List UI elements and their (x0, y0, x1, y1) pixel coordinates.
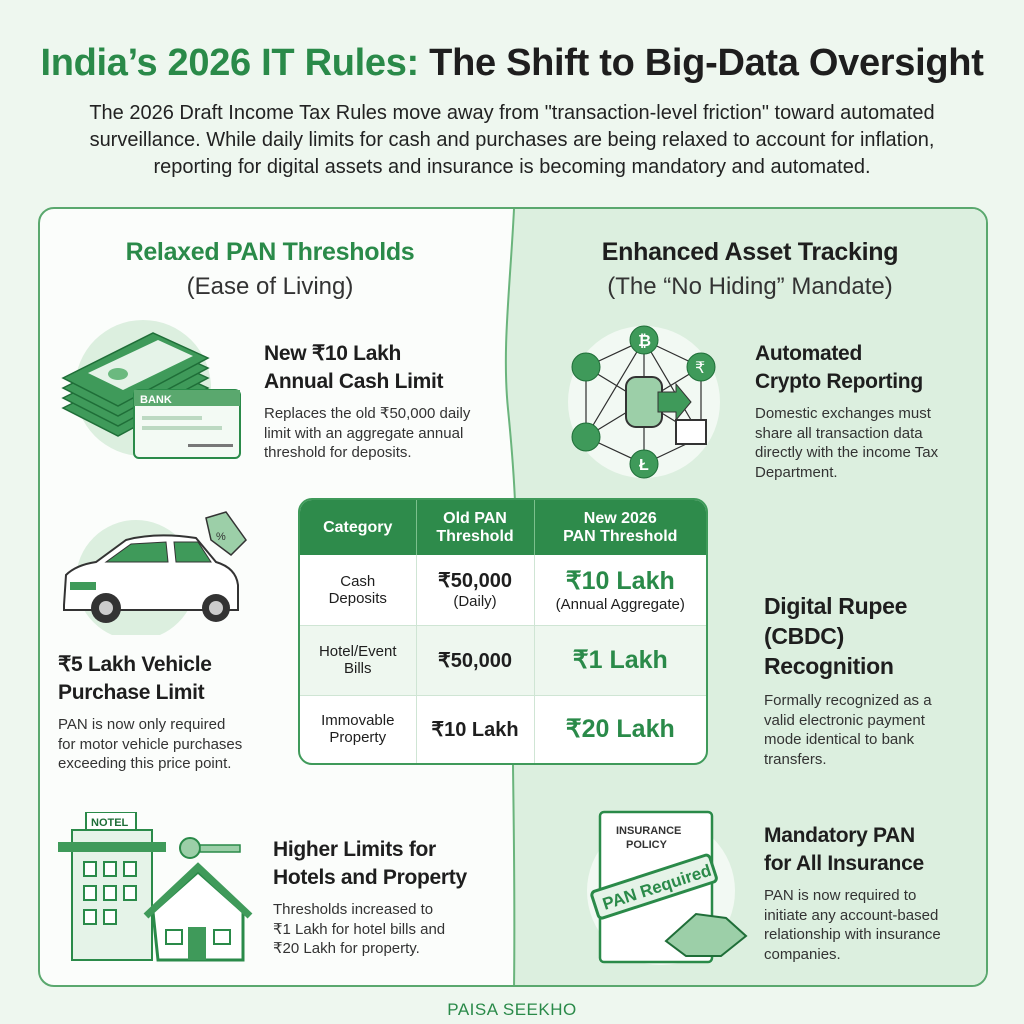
item: vehicle: ₹5 Lakh Vehicle (58, 653, 212, 676)
subtitle: The 2026 Draft Income Tax Rules move away from "transaction-level friction" toward automated (89, 102, 935, 124)
item: crypto: Domestic exchanges must (755, 405, 931, 422)
icon: crypto network (568, 326, 720, 478)
item: hotels: Thresholds increased to (273, 901, 433, 918)
item: cash limit: Annual Cash Limit (264, 370, 443, 393)
heading: enhanced: (The “No Hiding” Mandate) (607, 273, 893, 300)
icon: insurance policy (587, 810, 748, 965)
subtitle: surveillance. While daily limits for cash and purchases are being relaxed to account for inflation, (90, 129, 934, 151)
table: thresholds: ₹20 Lakh (566, 715, 675, 743)
table: thresholds: Property (329, 729, 386, 746)
item: hotels: Higher Limits for (273, 838, 436, 861)
item: cash limit: New ₹10 Lakh (264, 342, 401, 365)
title: India’s 2026 IT Rules: The Shift to Big-Data Oversight (40, 42, 984, 84)
item: vehicle: PAN is now only required (58, 716, 225, 733)
icon: crypto network: ₹ (695, 360, 705, 377)
item: hotels (273, 838, 467, 957)
table: thresholds: Immovable (321, 712, 394, 729)
icon: cash and bank: BANK (140, 394, 172, 406)
heading: enhanced (602, 238, 898, 300)
item: digital rupee: Digital Rupee (764, 593, 907, 619)
item: digital rupee: (CBDC) (764, 623, 844, 649)
subtitle (89, 102, 935, 178)
table: thresholds: Category (323, 518, 392, 536)
icon: hotel and house: NOTEL (91, 817, 129, 829)
item: crypto: Crypto Reporting (755, 370, 923, 393)
table: thresholds: ₹50,000 (438, 570, 512, 592)
main panel (38, 207, 988, 987)
table: thresholds: New 2026 (584, 510, 657, 526)
icon: crypto network: Ł (639, 457, 649, 474)
table: thresholds: (Daily) (453, 593, 497, 610)
item: cash limit: Replaces the old ₹50,000 daily (264, 405, 470, 422)
heading: relaxed: (Ease of Living) (187, 273, 353, 300)
icon: car: % (216, 531, 226, 543)
table: thresholds: Cash (340, 573, 375, 590)
item: vehicle: for motor vehicle purchases (58, 736, 242, 752)
heading: relaxed: Relaxed PAN Thresholds (126, 238, 414, 266)
item: vehicle (58, 653, 242, 772)
item: crypto: Automated (755, 342, 862, 365)
item: digital rupee: Recognition (764, 653, 894, 679)
icon: hotel and house (58, 812, 252, 962)
item: vehicle: exceeding this price point. (58, 755, 231, 772)
item: cash limit (264, 342, 470, 461)
item: cash limit: threshold for deposits. (264, 444, 412, 461)
item: vehicle: Purchase Limit (58, 681, 204, 704)
icon: insurance policy: INSURANCE (616, 825, 681, 837)
item: insurance: initiate any account-based (764, 906, 938, 924)
item: crypto: share all transaction data (755, 424, 923, 442)
item: crypto: directly with the income Tax (755, 444, 938, 461)
table: thresholds: ₹50,000 (438, 650, 512, 672)
table: thresholds: PAN Threshold (563, 528, 677, 544)
footer brand: PAISA SEEKHO (447, 1000, 577, 1019)
table: thresholds: ₹1 Lakh (573, 646, 668, 674)
item: hotels: Hotels and Property (273, 866, 467, 889)
item: crypto: Department. (755, 464, 838, 480)
icon: cash and bank (62, 320, 241, 459)
item: hotels: ₹1 Lakh for hotel bills and (273, 920, 445, 938)
item: insurance: relationship with insurance (764, 926, 941, 943)
heading: enhanced: Enhanced Asset Tracking (602, 238, 898, 266)
table: thresholds: ₹10 Lakh (566, 567, 675, 595)
heading: relaxed (126, 238, 414, 300)
item: insurance (764, 824, 941, 962)
table: thresholds: Old PAN (443, 510, 507, 526)
item: digital rupee: valid electronic payment (764, 712, 925, 728)
icon: crypto network: ₿ (638, 332, 651, 350)
item: cash limit: limit with an aggregate annual (264, 424, 463, 442)
item: insurance: for All Insurance (764, 852, 924, 875)
table: thresholds: Deposits (329, 590, 387, 607)
table: thresholds: Bills (344, 660, 372, 677)
item: insurance: Mandatory PAN (764, 824, 915, 847)
icon: insurance policy: POLICY (626, 839, 668, 851)
table: thresholds: ₹10 Lakh (431, 719, 519, 741)
item: digital rupee: Formally recognized as a (764, 692, 932, 709)
table: thresholds (298, 498, 708, 765)
item: insurance: PAN is now required to (764, 887, 916, 904)
table: thresholds: Threshold (436, 528, 514, 544)
item: crypto (755, 342, 938, 480)
item: digital rupee: transfers. (764, 750, 827, 768)
item: digital rupee: mode identical to bank (764, 731, 914, 748)
icon: insurance policy: PAN Required (600, 861, 714, 914)
icon: car (63, 511, 247, 635)
subtitle: reporting for digital assets and insurance is becoming mandatory and automated. (153, 156, 871, 178)
item: digital rupee (764, 593, 932, 768)
item: hotels: ₹20 Lakh for property. (273, 940, 420, 957)
item: insurance: companies. (764, 946, 841, 962)
table: thresholds: (Annual Aggregate) (556, 596, 685, 613)
table: thresholds: Hotel/Event (319, 643, 397, 660)
